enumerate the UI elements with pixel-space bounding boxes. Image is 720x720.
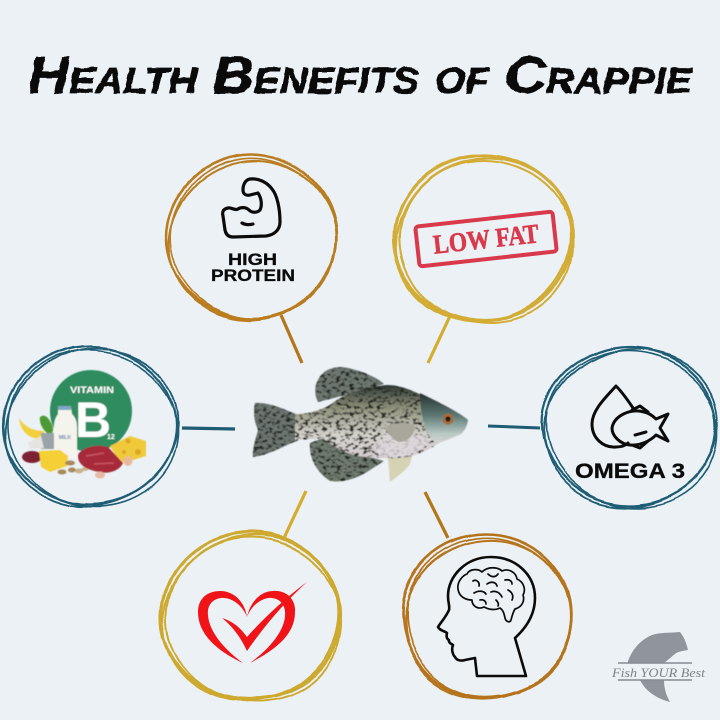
cheese right <box>110 436 146 463</box>
benefit: vitamin B12 <box>0 325 235 531</box>
egg <box>124 456 132 466</box>
pectoral fin <box>385 423 415 442</box>
fish body <box>295 385 468 458</box>
oil drop <box>592 386 633 447</box>
ring: brain health <box>382 516 594 720</box>
benefit: omega 3 <box>488 325 720 531</box>
nuts <box>58 460 88 474</box>
tail fin <box>253 403 299 457</box>
connector: vitamin B12 <box>182 428 235 429</box>
beet <box>22 451 42 463</box>
vitamin label: VITAMIN <box>70 385 114 395</box>
stamp: low fat <box>415 212 557 266</box>
title: Health Benefits of Crappie <box>28 47 693 105</box>
benefit: high protein <box>146 138 358 363</box>
central fish illustration <box>253 367 468 482</box>
benefit: low fat <box>372 132 596 363</box>
logo text: Fish YOUR Best <box>611 665 705 680</box>
fish belly highlight <box>377 434 432 457</box>
logo: fish your best <box>611 632 705 702</box>
connector: brain health <box>425 492 448 538</box>
ring: heart health <box>139 510 363 720</box>
logo fish <box>628 632 688 702</box>
connector: heart health <box>284 491 306 538</box>
can <box>41 433 55 449</box>
icon: vitamin B12 foods: MILK <box>59 435 71 441</box>
meat <box>78 446 123 473</box>
logo rules <box>618 663 692 680</box>
fish eye <box>442 414 454 424</box>
dorsal fin <box>315 367 384 402</box>
icon: vitamin B12 foods <box>19 370 146 478</box>
benefit: heart health <box>139 491 363 720</box>
fish head <box>420 393 468 444</box>
icon: head outline <box>438 557 535 676</box>
connector: high protein <box>281 315 302 363</box>
subscript 12: 12 <box>107 434 115 441</box>
ring: high protein <box>146 138 358 344</box>
cucumber <box>40 416 53 433</box>
cheese left <box>39 450 68 472</box>
stamp: low fat: LOW FAT <box>432 218 540 260</box>
connector: omega 3 <box>488 426 540 428</box>
ring: omega 3 <box>523 325 720 531</box>
icon: heart with check mark <box>198 582 307 663</box>
green vitamin disc <box>50 370 132 452</box>
icon: flexed bicep <box>223 179 280 237</box>
connector: low fat <box>428 316 450 363</box>
label: omega 3: OMEGA 3 <box>575 460 685 483</box>
label: high protein: PROTEIN <box>211 266 295 285</box>
ring: vitamin B12 <box>0 325 201 531</box>
big B: B <box>75 392 111 448</box>
anal fin <box>310 438 384 481</box>
label: high protein: HIGH <box>228 250 277 269</box>
banana <box>19 418 44 439</box>
small fish <box>612 406 668 448</box>
icon: brain <box>458 568 524 622</box>
icon: drop and fish <box>592 386 668 448</box>
ring: low fat <box>372 132 596 348</box>
milk bottle <box>54 407 77 460</box>
pelvic fin <box>388 456 412 482</box>
benefit: brain health <box>382 492 594 720</box>
